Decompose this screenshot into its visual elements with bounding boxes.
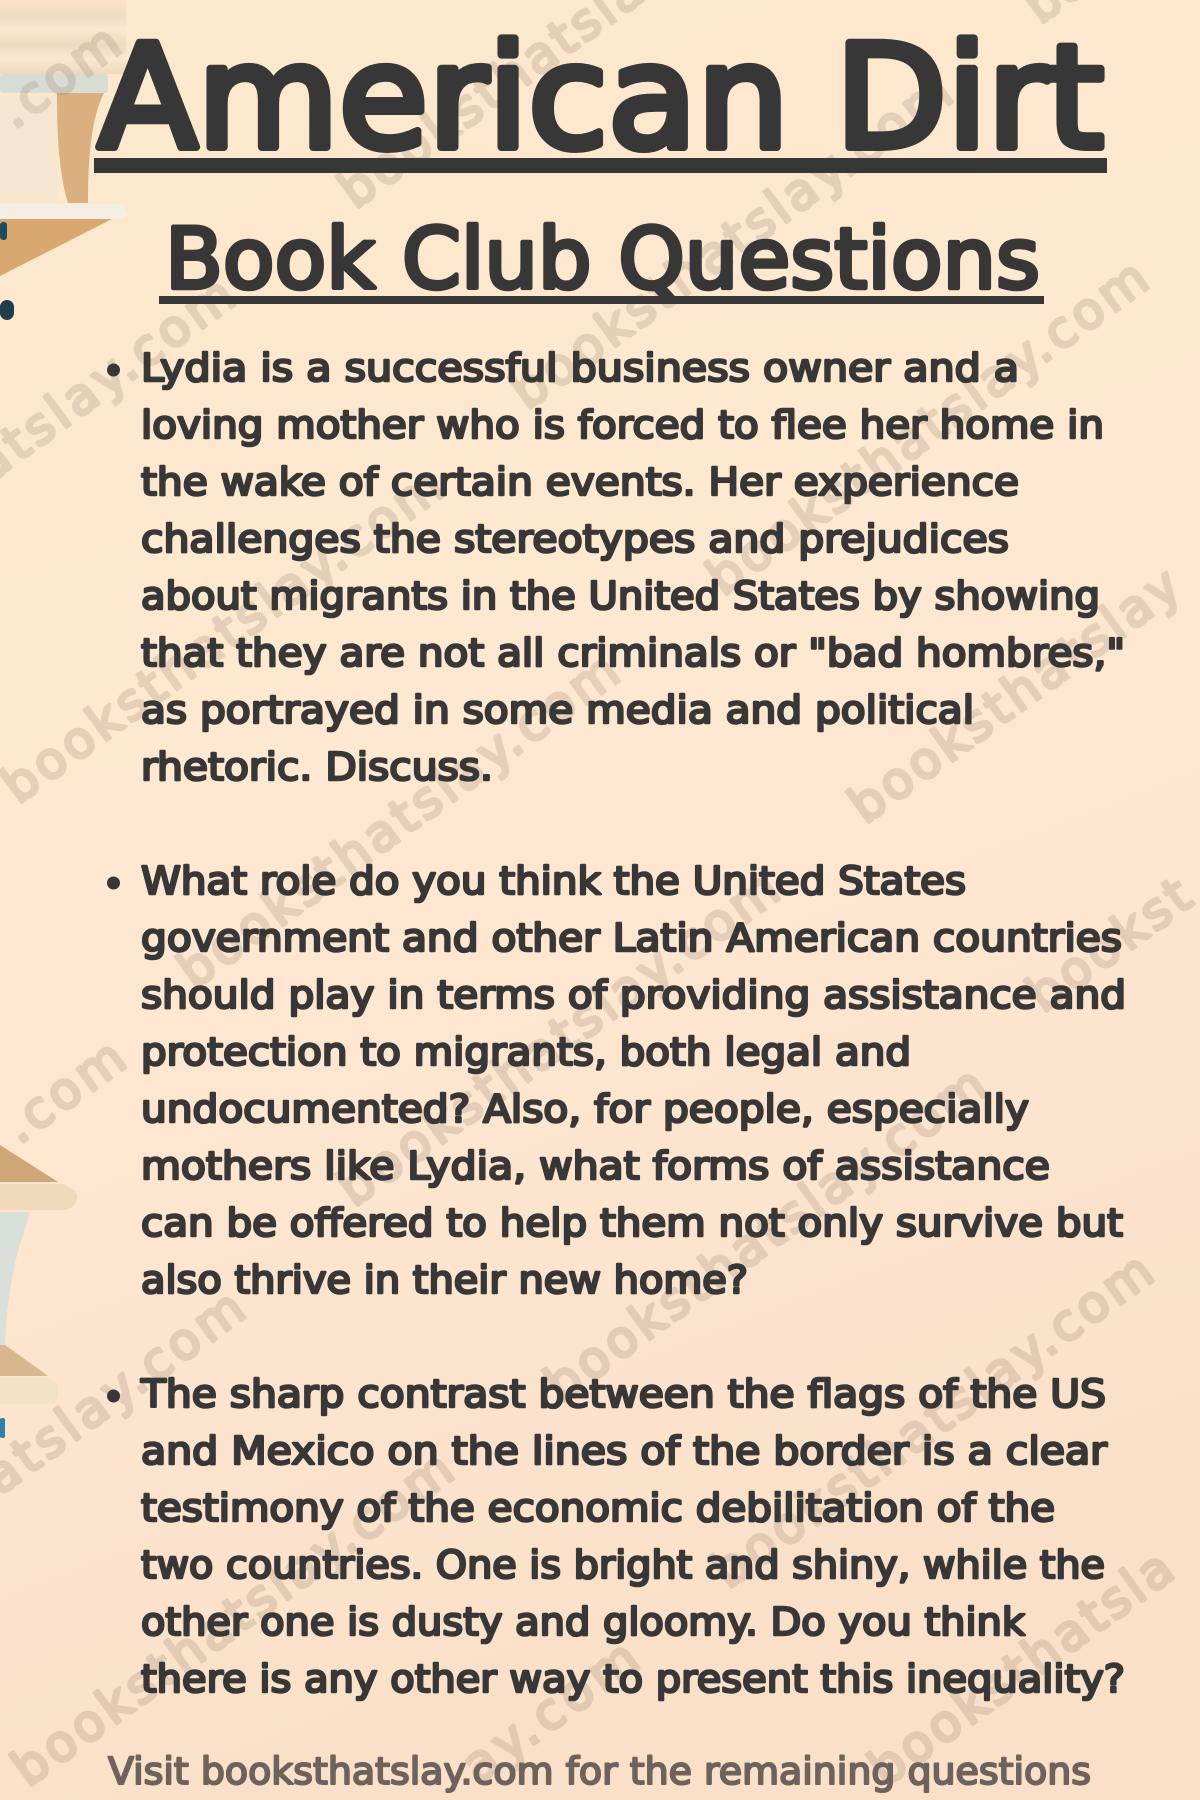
question 1: the wake of certain events. Her experience: [141, 460, 1019, 504]
question 1: as portrayed in some media and political: [141, 688, 974, 732]
watermarks: booksthatslay.com: [701, 1241, 1164, 1600]
question 2: should play in terms of providing assistance and: [141, 973, 1126, 1017]
question 2: undocumented? Also, for people, especially: [141, 1087, 1029, 1131]
question 1: rhetoric. Discuss.: [141, 745, 493, 789]
watermarks: booksthatslay.com: [696, 248, 1159, 607]
question 1: loving mother who is forced to flee her home in: [141, 403, 1104, 447]
question 3: two countries. One is bright and shiny, while the: [141, 1543, 1105, 1587]
question 1: Lydia is a successful business owner and a: [141, 346, 1019, 390]
watermarks: booksthatslay: [838, 556, 1191, 835]
question 1: [107, 346, 1125, 789]
question 3: there is any other way to present this inequality?: [141, 1657, 1125, 1701]
image: upper book stack: [0, 0, 128, 320]
title: American Dirt: [98, 14, 1104, 181]
watermarks: booksthatslay.com: [0, 456, 454, 815]
image: lower book stack: [0, 1145, 77, 1438]
watermarks: ay.com: [451, 1628, 649, 1795]
subtitle: Book Club Questions: [165, 210, 1040, 308]
footer note: Visit booksthatslay.com for the remaining questions: [108, 1750, 1091, 1793]
question 2: mothers like Lydia, what forms of assistance: [141, 1144, 1050, 1188]
watermarks: bookst: [1016, 866, 1200, 1024]
watermarks: booksthatsla: [858, 1539, 1184, 1798]
question 2: protection to migrants, both legal and: [141, 1030, 911, 1074]
question 2: government and other Latin American countries: [141, 916, 1122, 960]
question 3: [107, 1372, 1125, 1701]
question 3: and Mexico on the lines of the border is a clear: [141, 1429, 1107, 1473]
watermarks: booksthatslay.com: [1, 1439, 464, 1798]
question 3: testimony of the economic debilitation of the: [141, 1486, 1055, 1530]
question 3: other one is dusty and gloomy. Do you think: [141, 1600, 1025, 1644]
watermarks: booksthatslay.com: [534, 1055, 997, 1414]
question 2: can be offered to help them not only survive but: [141, 1201, 1123, 1245]
question 2: [107, 859, 1126, 1302]
watermarks: booksthatslay.com: [500, 62, 963, 421]
question 2: also thrive in their new home?: [141, 1258, 748, 1302]
question 1: that they are not all criminals or "bad hombres,": [141, 631, 1125, 675]
watermarks: booksthatslay.com: [327, 859, 790, 1218]
question 1: challenges the stereotypes and prejudices: [141, 517, 1009, 561]
question 2: What role do you think the United States: [141, 859, 966, 903]
question 3: The sharp contrast between the flags of the US: [140, 1372, 1106, 1416]
question 1: about migrants in the United States by showing: [141, 574, 1100, 618]
watermarks: booksthatslay.com: [167, 641, 630, 1000]
